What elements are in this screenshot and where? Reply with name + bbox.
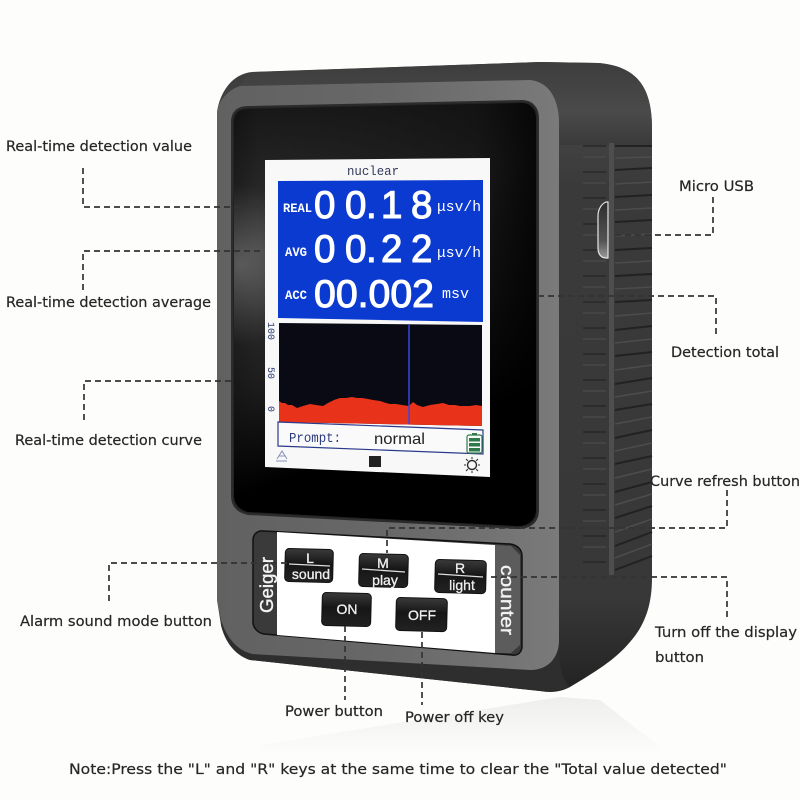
LCD screen: [264, 158, 490, 477]
Geiger label: Geiger: [257, 557, 277, 613]
prompt bar: normal: [374, 431, 425, 448]
real-time reading: [283, 184, 481, 227]
icon: battery: [467, 433, 482, 453]
real-time reading: REAL: [283, 201, 312, 216]
counter label: counter: [497, 565, 517, 635]
label: curve refresh button: Curve refresh button: [650, 474, 800, 490]
axis labels: 0: [264, 406, 275, 412]
accumulated reading: [285, 273, 469, 316]
port: micro USB: [598, 202, 608, 258]
icon: brightness sun: [464, 457, 480, 473]
button: L sound: [285, 548, 333, 583]
prompt bar: Prompt:: [289, 431, 341, 447]
label: alarm sound mode button: Alarm sound mode button: [20, 614, 212, 630]
real-time reading: 0: [314, 184, 335, 227]
real-time reading: .: [366, 184, 377, 227]
leader: real-time detection curve: [84, 381, 232, 420]
leader: detection total: [538, 296, 716, 334]
right label band: [495, 545, 520, 653]
leader: alarm sound mode button: [109, 563, 290, 601]
readings panel: [278, 180, 483, 322]
button: R light: light: [449, 577, 475, 593]
label: power off key: Power off key: [405, 710, 504, 726]
button: ON: [322, 592, 371, 627]
white key area: [277, 532, 495, 653]
leader: curve refresh button: [387, 490, 727, 553]
label: power button: Power button: [285, 704, 383, 720]
leader: micro USB: [613, 197, 713, 235]
front face: [217, 80, 559, 670]
accumulated reading: msv: [442, 286, 469, 303]
average reading: μsv/h: [437, 245, 481, 262]
leader: power button: [344, 626, 346, 700]
icon: signal waves: [276, 451, 287, 461]
label: turn off the display button: button: [655, 650, 704, 666]
detection curve: [279, 397, 482, 426]
device body silhouette: [217, 62, 652, 692]
average reading: 2: [411, 228, 432, 271]
icon: stop square: [369, 456, 381, 467]
leader: real-time detection value: [83, 168, 260, 207]
axis labels: 100: [264, 322, 275, 340]
button: ON: ON: [336, 601, 358, 617]
side panel ribs: [583, 143, 652, 575]
curve chart: [264, 322, 482, 426]
button: OFF: [396, 597, 447, 632]
average reading: AVG: [285, 245, 307, 260]
leader: real-time detection average: [83, 251, 260, 290]
real-time reading: 1: [381, 184, 402, 227]
label: real-time detection value: Real-time detection value: [6, 139, 192, 155]
label: turn off the display button: Turn off the display: [654, 625, 797, 641]
button: L sound: L: [306, 550, 314, 566]
label: turn off the display button: [654, 625, 797, 666]
screen bezel: [232, 101, 538, 528]
label: detection total: Detection total: [671, 345, 779, 361]
button panel: [253, 531, 522, 655]
leader: power off key: [421, 632, 423, 705]
prompt bar: [278, 422, 483, 454]
front bottom edge: [221, 610, 570, 692]
axis labels: 50: [264, 367, 275, 379]
screen title: nuclear: [347, 164, 399, 179]
button: M play: M: [377, 555, 389, 571]
accumulated reading: 00.002: [314, 273, 434, 316]
cursor line: [408, 324, 410, 424]
device top shoulder: [240, 62, 652, 145]
button: R light: R: [455, 560, 465, 576]
real-time reading: 8: [411, 184, 432, 227]
average reading: 0: [314, 228, 335, 271]
axis labels: [264, 322, 275, 412]
average reading: 2: [381, 228, 402, 271]
button: M play: play: [372, 572, 398, 588]
real-time reading: μsv/h: [437, 199, 481, 216]
note: Note:Press the "L" and "R" keys at the same time to clear the "Total value detected": [69, 762, 727, 778]
button: M play: [359, 553, 408, 588]
average reading: [285, 228, 481, 271]
device reflection: [260, 697, 670, 755]
average reading: .: [366, 228, 377, 271]
leader: turn off the display button: [487, 577, 727, 617]
button: L sound: sound: [292, 566, 330, 582]
average reading: 0: [345, 228, 366, 271]
button: OFF: OFF: [408, 607, 436, 623]
real-time reading: 0: [345, 184, 366, 227]
label: micro USB: Micro USB: [679, 179, 754, 195]
label: real-time detection average: Real-time detection average: [6, 295, 211, 311]
accumulated reading: ACC: [285, 288, 307, 303]
label: real-time detection curve: Real-time detection curve: [15, 433, 202, 449]
device: Geiger counter: [217, 62, 652, 692]
button: R light: [435, 559, 486, 594]
